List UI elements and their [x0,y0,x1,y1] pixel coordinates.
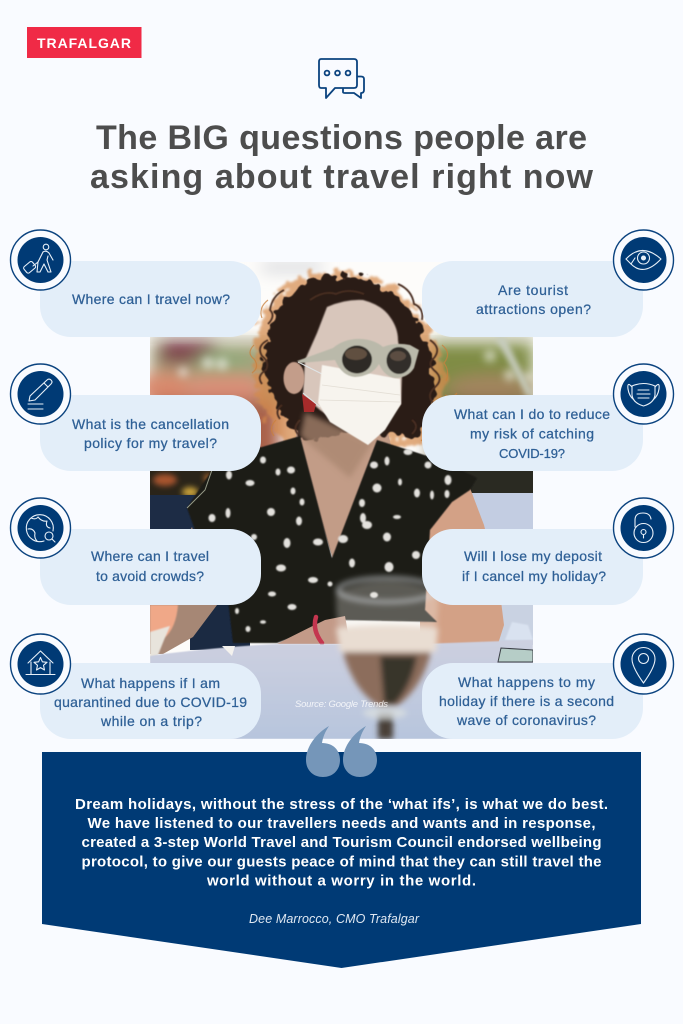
dress [187,436,477,643]
speech panel [40,663,261,739]
face [302,298,403,416]
sunglasses [297,339,419,378]
photo source credit: Source: Google Trends [295,699,388,710]
icon: face mask [614,364,674,424]
quote text: created a 3-step World Travel and Tourism Council endorsed wellbeing [82,834,602,851]
question: avoid crowds: to avoid crowds? [96,568,204,584]
question: second wave: wave of coronavirus? [456,712,596,728]
question: quarantined: What happens if I am [81,675,220,691]
question: tourist attractions [422,230,674,337]
question: reduce risk: COVID-19? [499,446,565,461]
question: second wave: holiday if there is a second [439,693,614,709]
question: lose deposit: if I cancel my holiday? [462,568,606,584]
speech panel [40,395,261,471]
question: lose deposit [422,498,674,605]
question: tourist attractions: attractions open? [476,301,591,317]
question: cancellation policy: policy for my travel? [84,435,217,451]
icon: pencil [10,364,70,424]
left arm [150,527,217,654]
icon: map pin [614,634,674,694]
wine glass [336,578,438,739]
question: quarantined: while on a trip? [100,713,202,729]
left orange glass [150,605,178,660]
right arm [420,488,504,644]
speech panel [422,261,643,337]
question: reduce risk: What can I do to reduce [454,406,610,422]
hair curls [260,284,440,434]
quote text: We have listened to our travellers needs and wants and in response, [88,815,596,832]
icon: house with star [10,634,70,694]
question: second wave: What happens to my [458,674,595,690]
earring [302,394,316,412]
icon: open padlock [614,498,674,558]
question: cancellation policy [10,364,261,471]
logo: Trafalgar: TRAFALGAR [37,35,131,51]
quote text: world without a worry in the world. [206,872,476,890]
hair [265,276,435,440]
question: second wave [422,634,674,739]
icon: traveller with suitcase [10,230,70,290]
title: The BIG questions people are [96,119,587,157]
quote text: protocol, to give our guests peace of mind that they can still travel the [82,854,602,870]
icon: chat bubbles [319,59,364,98]
face mask [318,365,401,445]
panel: quote banner [42,752,641,968]
logo: Trafalgar [27,27,142,58]
quote text: Dream holidays, without the stress of the ‘what ifs’, is what we do best. [75,796,608,813]
question: avoid crowds: Where can I travel [91,548,209,564]
question: lose deposit: Will I lose my deposit [464,548,602,564]
speech panel [422,395,643,471]
question: avoid crowds [10,498,261,605]
ear [284,362,304,394]
neck and chest [296,430,390,558]
photo: woman wearing mask and sunglasses at a table [135,262,535,739]
speech panel [40,529,261,605]
title: asking about travel right now [90,158,594,196]
dress dots [208,449,452,632]
speech panel [422,663,643,739]
question: quarantined: quarantined due to COVID-19 [54,694,247,710]
neck shadow [298,411,372,476]
question: quarantined [10,634,261,739]
icon: globe with magnifier [10,498,70,558]
question: reduce risk [422,364,674,471]
speech panel [40,261,261,337]
mask straps [298,362,322,407]
question: tourist attractions: Are tourist [498,282,568,298]
hair halo [255,273,444,445]
phone on table [498,648,533,662]
icon: quotation marks [306,726,377,777]
hand and bracelet [277,616,350,644]
title [90,119,594,196]
question: cancellation policy: What is the cancellation [72,416,229,432]
table [150,640,533,739]
speech panel [422,529,643,605]
question: reduce risk: my risk of catching [470,426,594,442]
question: where can I travel now [10,230,261,337]
question: where can I travel now: Where can I travel now? [72,291,230,307]
banner shape [42,752,641,968]
quote text [75,796,608,890]
icon: eye [614,230,674,290]
attribution: Dee Marrocco, CMO Trafalgar [249,912,420,926]
